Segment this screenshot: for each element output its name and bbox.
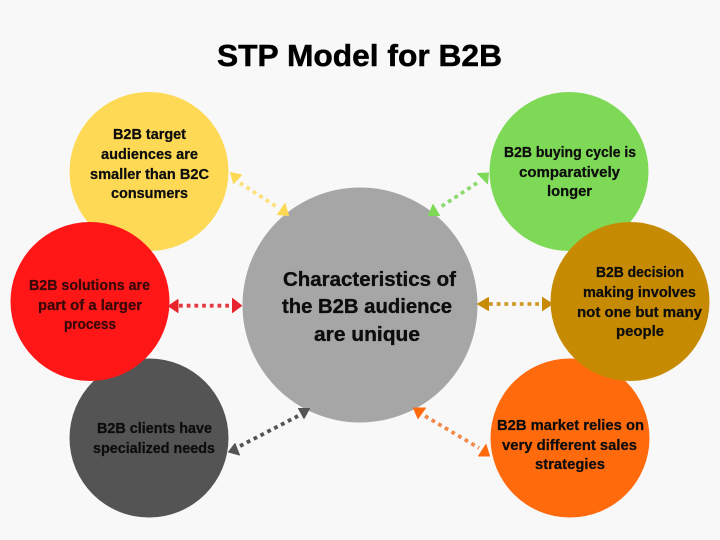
arrow: brown [478, 298, 552, 310]
circle: decision making: making involves [583, 285, 696, 301]
circle: target audiences: consumers [111, 186, 188, 202]
circle: buying cycle: B2B buying cycle is [504, 145, 636, 161]
circle: decision making: people [616, 324, 664, 340]
circle: sales strategies: very different sales [502, 438, 637, 454]
circle: sales strategies: strategies [535, 457, 605, 473]
circle: decision making: B2B decision [596, 265, 684, 281]
central circle: are unique [314, 324, 420, 346]
circle: decision making: not one but many [577, 305, 702, 321]
circle: specialized needs: specialized needs [93, 441, 215, 457]
circle: target audiences: audiences are [101, 147, 198, 163]
arrow: orange [414, 408, 490, 456]
circle: specialized needs: B2B clients have [97, 421, 212, 437]
circle: buying cycle: longer [547, 184, 592, 200]
circle: buying cycle [490, 92, 648, 251]
circle: target audiences: B2B target [113, 127, 186, 143]
circle: solutions: process [64, 317, 116, 333]
arrow: green [428, 173, 488, 216]
circle: buying cycle: comparatively [519, 165, 620, 181]
title: STP Model for B2B [217, 38, 502, 73]
circle: target audiences: smaller than B2C [90, 167, 210, 183]
circle: solutions: B2B solutions are [29, 278, 150, 294]
circle: solutions: part of a larger [38, 298, 142, 314]
circle: sales strategies [490, 358, 650, 518]
central circle: Characteristics of [283, 269, 456, 291]
circle: solutions [10, 222, 170, 381]
arrow: yellow [230, 172, 288, 216]
circle: target audiences [70, 92, 228, 251]
circle: sales strategies: B2B market relies on [497, 418, 644, 434]
central circle [242, 188, 478, 422]
arrow: dark grey [228, 408, 310, 455]
circle: decision making [550, 222, 710, 381]
arrow: red [168, 298, 242, 312]
circle: specialized needs [70, 358, 228, 518]
central circle: the B2B audience [282, 296, 452, 318]
